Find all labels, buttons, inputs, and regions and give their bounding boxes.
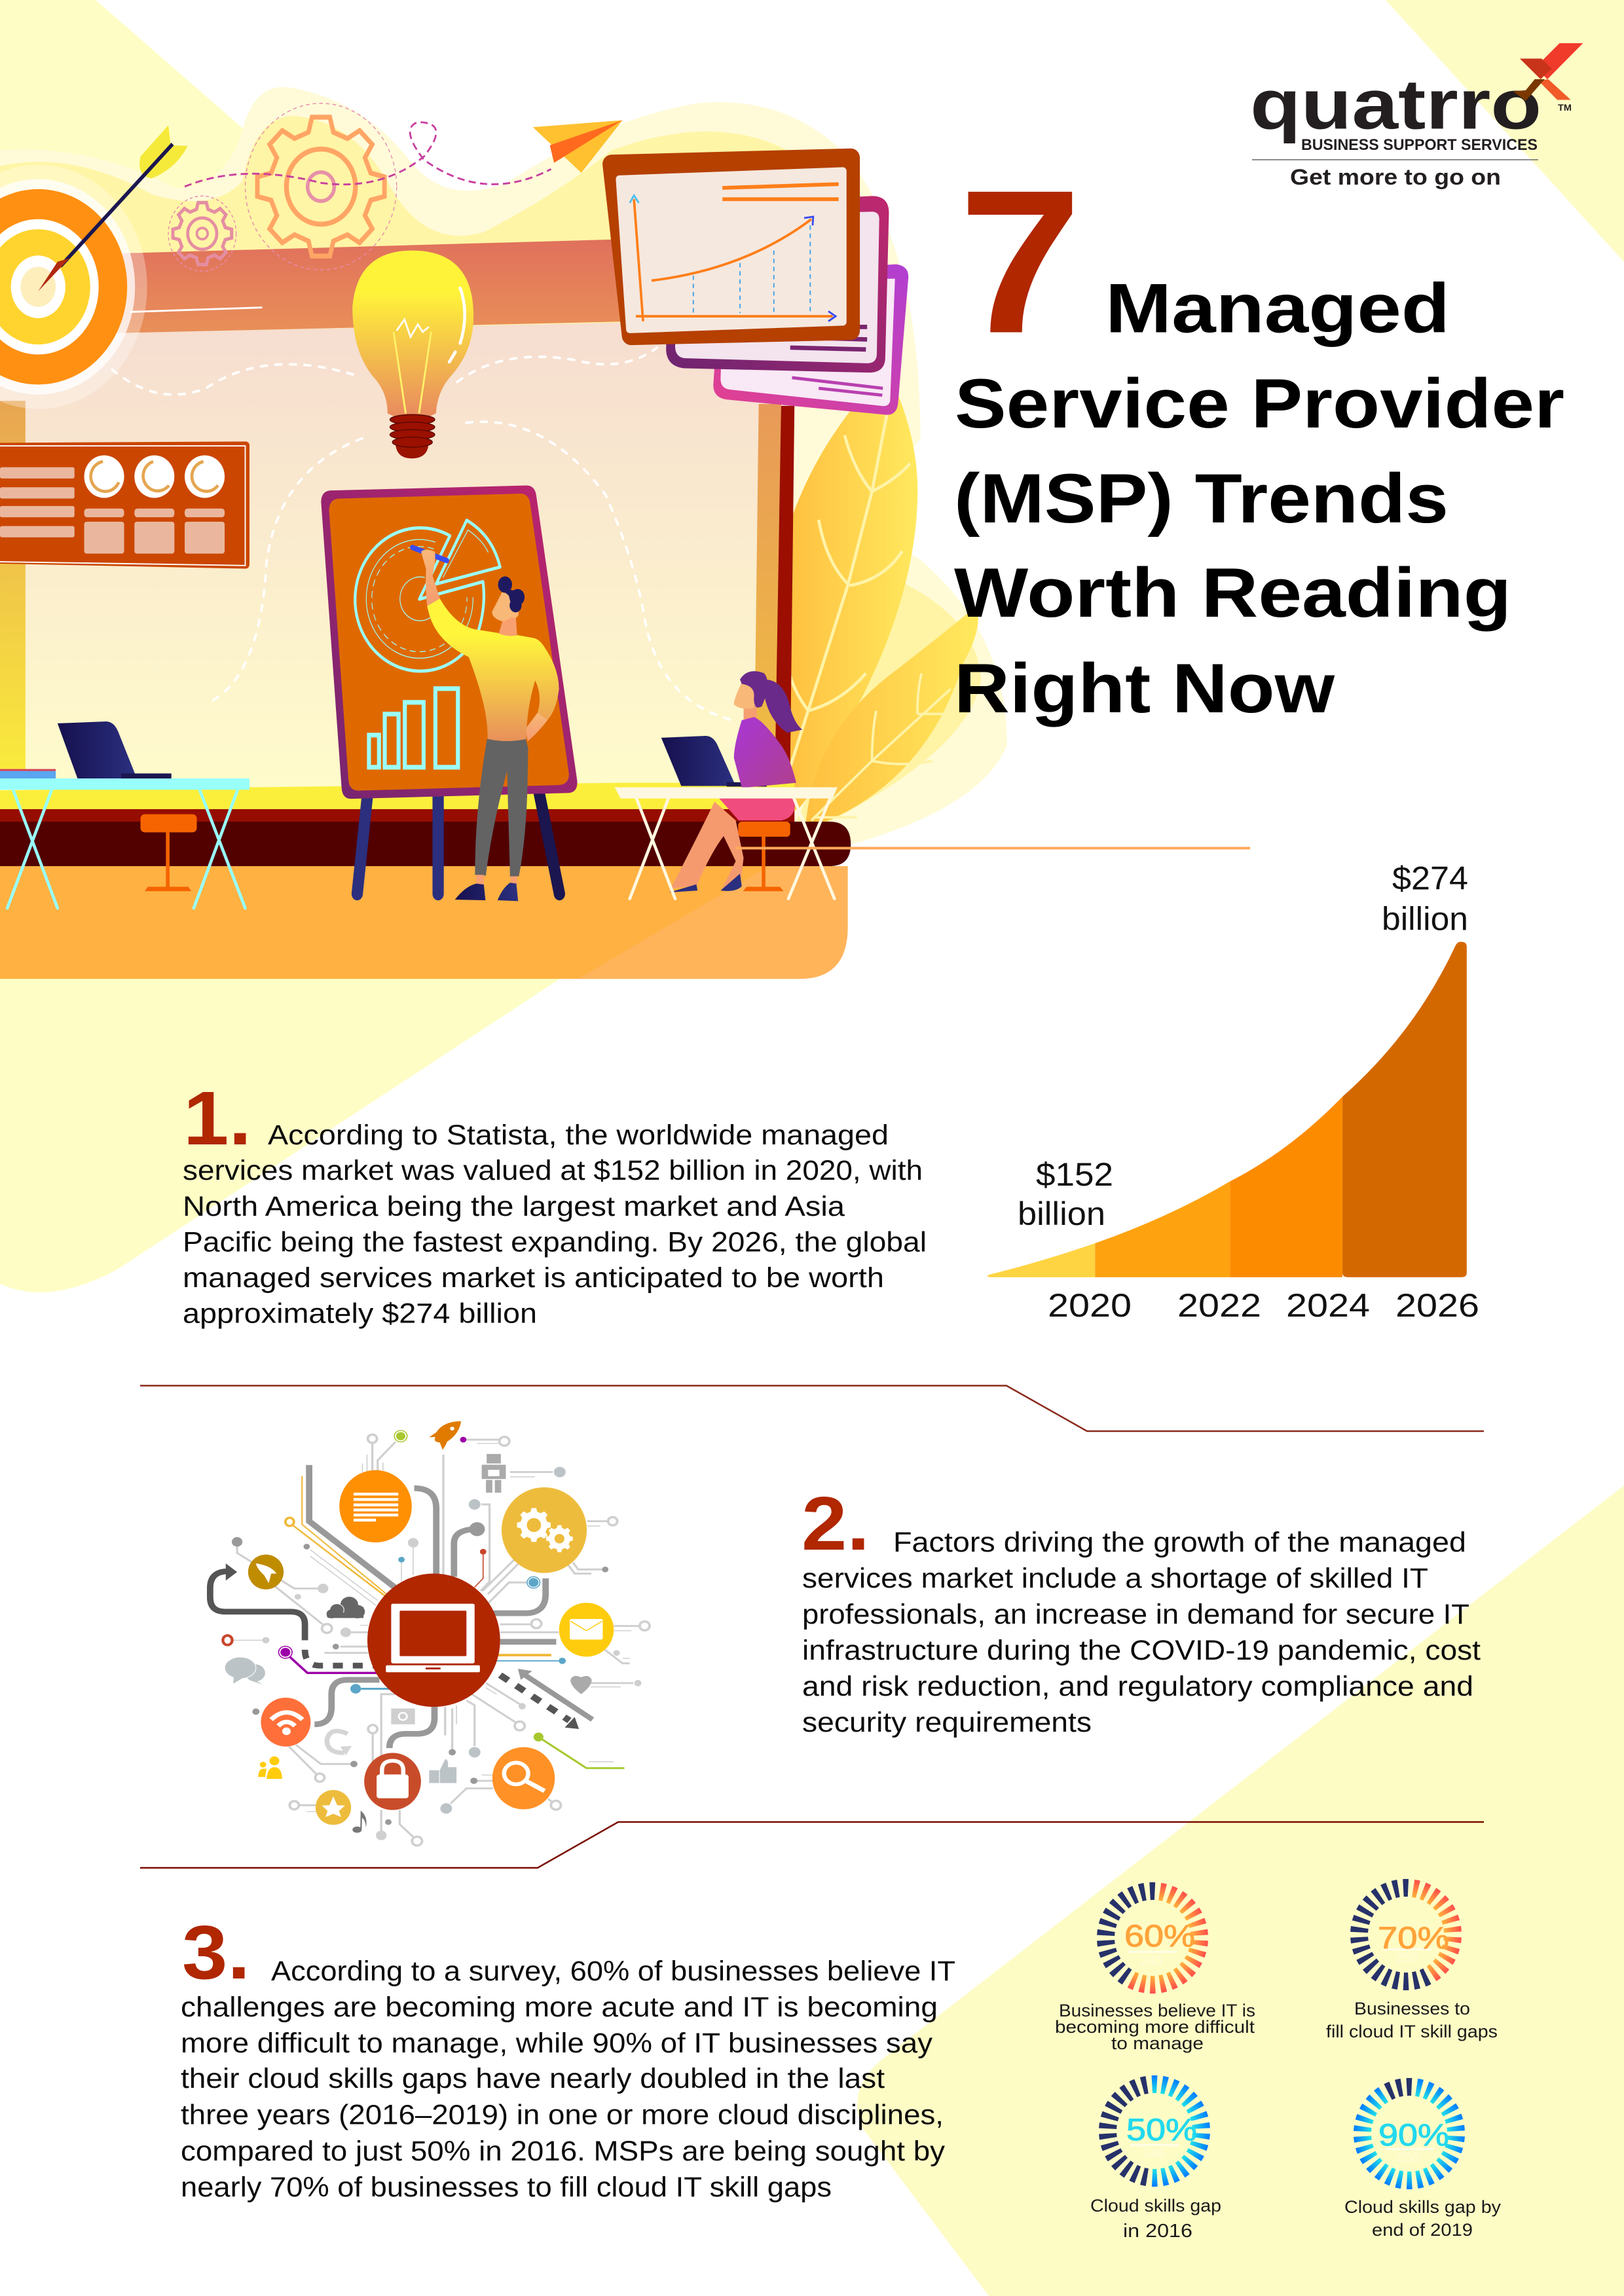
year 2022: 2022 [1177, 1287, 1261, 1324]
title line 1: Managed [1105, 268, 1450, 347]
icon: heart [570, 1676, 592, 1694]
area chart: market growth [987, 941, 1467, 1277]
caption: 70%: Businesses to [1354, 1999, 1470, 2018]
band highlight [130, 308, 262, 312]
caption: 50%: in 2016 [1123, 2221, 1192, 2242]
caption: 90%: end of 2019 [1372, 2220, 1473, 2240]
caption: 60%: to manage [1111, 2033, 1204, 2053]
wall top band [0, 238, 666, 336]
panel: back document [713, 264, 908, 415]
logo trademark: TM [1558, 102, 1572, 113]
big leaf [785, 369, 917, 814]
icon: orange rocket [429, 1421, 461, 1450]
year 2020: 2020 [1048, 1287, 1132, 1324]
icon: star [316, 1790, 351, 1825]
text block: trend 3: challenges are becoming more acute and IT is becoming [181, 1992, 938, 2023]
title [954, 148, 1564, 727]
text block: trend 3: According to a survey, 60% of businesses believe IT [271, 1956, 955, 1987]
logo tagline: Get more to go on [1290, 165, 1501, 190]
logo X mark [1513, 43, 1583, 101]
caption: 50%: Cloud skills gap [1090, 2196, 1221, 2215]
number 1: 1. [183, 1076, 251, 1161]
text block: trend 3: compared to just 50% in 2016. MSPs are being sought by [181, 2136, 946, 2167]
segment 2026 [1342, 941, 1467, 1277]
right laptop [661, 736, 767, 786]
text block: trend 1 [183, 1076, 927, 1329]
value label billion: billion [1018, 1195, 1105, 1232]
donut: 70%: 250 [1395, 1951, 1417, 1965]
title line 5: Right Now [954, 649, 1335, 727]
text block: trend 2 [802, 1481, 1481, 1738]
text block: trend 1: North America being the largest market and Asia [183, 1191, 845, 1222]
panel: growth chart monitor [612, 158, 851, 336]
icon: robot [482, 1454, 506, 1493]
title line 3: (MSP) Trends [954, 459, 1449, 538]
wall [0, 319, 781, 792]
number 2: 2. [802, 1481, 870, 1566]
caption: 60% [1055, 2001, 1255, 2053]
title number 7: 7 [959, 148, 1082, 376]
pink dashed flight path [185, 122, 551, 187]
floor maroon strip [0, 822, 851, 866]
icon: technology network [210, 1421, 650, 1846]
bar chart on board [369, 689, 458, 767]
value label 274: $274 [1392, 860, 1468, 897]
title line 2: Service Provider [955, 364, 1564, 443]
icon: chat bubbles [225, 1657, 265, 1685]
woman figure [669, 671, 802, 892]
icon: music note [352, 1811, 367, 1833]
thick grey traces [309, 1465, 556, 1748]
icon: small gear [168, 196, 236, 271]
right post [754, 404, 794, 786]
halo inner [787, 583, 981, 843]
segment 2024 [1230, 1097, 1342, 1277]
icon: envelope [559, 1603, 614, 1657]
floor yellow strip [0, 783, 794, 809]
floor highlight [578, 866, 848, 979]
value label 152: $152 [1036, 1156, 1113, 1193]
icon: people [258, 1757, 282, 1779]
icon: light bulb [352, 251, 473, 458]
year 2024: 2024 [1286, 1287, 1370, 1324]
value label billion: billion [1382, 901, 1468, 938]
divider 1 [140, 1385, 1484, 1431]
caption: 60%: becoming more difficult [1055, 2017, 1255, 2037]
text block: trend 2: security requirements [802, 1707, 1092, 1738]
donut: 50%: 246 [1143, 2147, 1164, 2161]
left stool [141, 814, 197, 891]
text block: trend 3: three years (2016–2019) in one or more cloud disciplines, [181, 2099, 944, 2130]
icon: cloud [327, 1597, 365, 1618]
text block: trend 1: Pacific being the fastest expanding. By 2026, the global [183, 1227, 927, 1258]
man figure [413, 547, 559, 901]
caption: 90% [1344, 2197, 1502, 2240]
donut: 90%: 250 [1397, 2151, 1419, 2165]
caption: 70% [1326, 1999, 1498, 2041]
donut: 50%: 50% [1126, 2112, 1197, 2147]
logo divider [1252, 159, 1538, 160]
number 3: 3. [182, 1910, 250, 1995]
icon: large gear [246, 103, 397, 270]
board surface [329, 494, 569, 791]
grey arrow [518, 1669, 593, 1720]
icon: small rocket [248, 1554, 284, 1590]
halo behind the leaves [787, 501, 1007, 845]
donut: 70%: 70% [1378, 1920, 1449, 1955]
icon: target [0, 165, 147, 409]
caption: 60%: Businesses believe IT is [1059, 2001, 1255, 2020]
chart labels [1018, 860, 1479, 1324]
dark arrow path [210, 1563, 579, 1729]
soft glow behind the scene [0, 87, 921, 627]
right table [615, 787, 838, 899]
text block: trend 3: their cloud skills gaps have nearly doubled in the last [181, 2063, 885, 2094]
title line 4: Worth Reading [954, 553, 1511, 632]
year 2026: 2026 [1395, 1287, 1479, 1324]
illustration: office scene [0, 87, 1007, 979]
icon: wifi [261, 1698, 310, 1747]
icon: thumbs up [429, 1759, 456, 1783]
donut: 60% [1088, 1873, 1217, 2003]
background: top-left and lower-left yellow shape [0, 0, 982, 1292]
right stool [738, 822, 790, 891]
logo subtitle: BUSINESS SUPPORT SERVICES [1301, 136, 1538, 154]
donut: 60%: 60% [1124, 1918, 1195, 1953]
coloured traces [223, 1476, 625, 1768]
text block: trend 2: and risk reduction, and regulatory compliance and [802, 1671, 1473, 1702]
easel legs [357, 792, 559, 894]
text block: trend 2: infrastructure during the COVID-19 pandemic, cost [802, 1635, 1481, 1666]
text block: trend 1: managed services market is anticipated to be worth [183, 1262, 884, 1294]
donut: 90%: 90% [1378, 2117, 1449, 2152]
icon: padlock [364, 1753, 421, 1810]
segment 2020 [987, 1243, 1095, 1277]
donut: 90% [1346, 2071, 1472, 2196]
pie chart on board [355, 520, 500, 671]
text block: trend 1: services market was valued at $152 billion in 2020, with [183, 1155, 923, 1186]
text block: trend 3: nearly 70% of businesses to fill cloud IT skill gaps [181, 2172, 832, 2203]
caption: 90%: Cloud skills gap by [1344, 2197, 1502, 2217]
text block: trend 3: more difficult to manage, while 90% of IT businesses say [181, 2028, 933, 2059]
easel with man drawing [321, 486, 578, 901]
floor red strip [0, 809, 794, 822]
small node dots and rings [232, 1430, 650, 1846]
thin grey traces [233, 1440, 638, 1838]
orange accent line [735, 847, 1250, 850]
text block: trend 1: approximately $274 billion [183, 1298, 537, 1329]
caption: 50% [1090, 2196, 1221, 2242]
background: bottom-right yellow shape [857, 1485, 1624, 2296]
text block: trend 2: professionals, an increase in demand for secure IT [802, 1599, 1469, 1630]
text block: trend 2: Factors driving the growth of the managed [893, 1527, 1466, 1558]
donut: 60%: 246 [1141, 1954, 1162, 1968]
floor orange [0, 866, 848, 979]
icon: document [339, 1470, 412, 1542]
panel: left dashboard [0, 441, 249, 569]
donut: 70% [1343, 1872, 1469, 1997]
divider 2 [140, 1822, 1484, 1868]
icon: paper plane [533, 120, 623, 173]
text block: trend 3 [181, 1910, 955, 2203]
yellow wave behind the wall [0, 116, 860, 338]
icon: camera [391, 1709, 415, 1724]
left table with laptop [0, 721, 249, 908]
small leaf [805, 606, 978, 829]
white dashed paths [112, 348, 733, 720]
donut: 50% [1101, 2077, 1208, 2185]
easel board [321, 486, 578, 799]
background: top-right yellow triangle [1386, 0, 1624, 262]
icon: refresh [327, 1731, 352, 1755]
icon: magnifier [492, 1747, 555, 1810]
left post [0, 401, 26, 780]
text block: trend 2: services market include a shortage of skilled IT [802, 1563, 1428, 1594]
panel: middle document [666, 196, 889, 373]
caption: 70%: fill cloud IT skill gaps [1326, 2022, 1498, 2041]
segment 2022 [1095, 1181, 1230, 1277]
text block: trend 1: According to Statista, the worldwide managed [268, 1120, 889, 1151]
logo wordmark: quatrro [1250, 64, 1541, 144]
icon: central laptop [367, 1574, 500, 1707]
icon: arrow in target [38, 125, 188, 291]
logo [1250, 43, 1583, 190]
icon: gears [502, 1487, 587, 1573]
